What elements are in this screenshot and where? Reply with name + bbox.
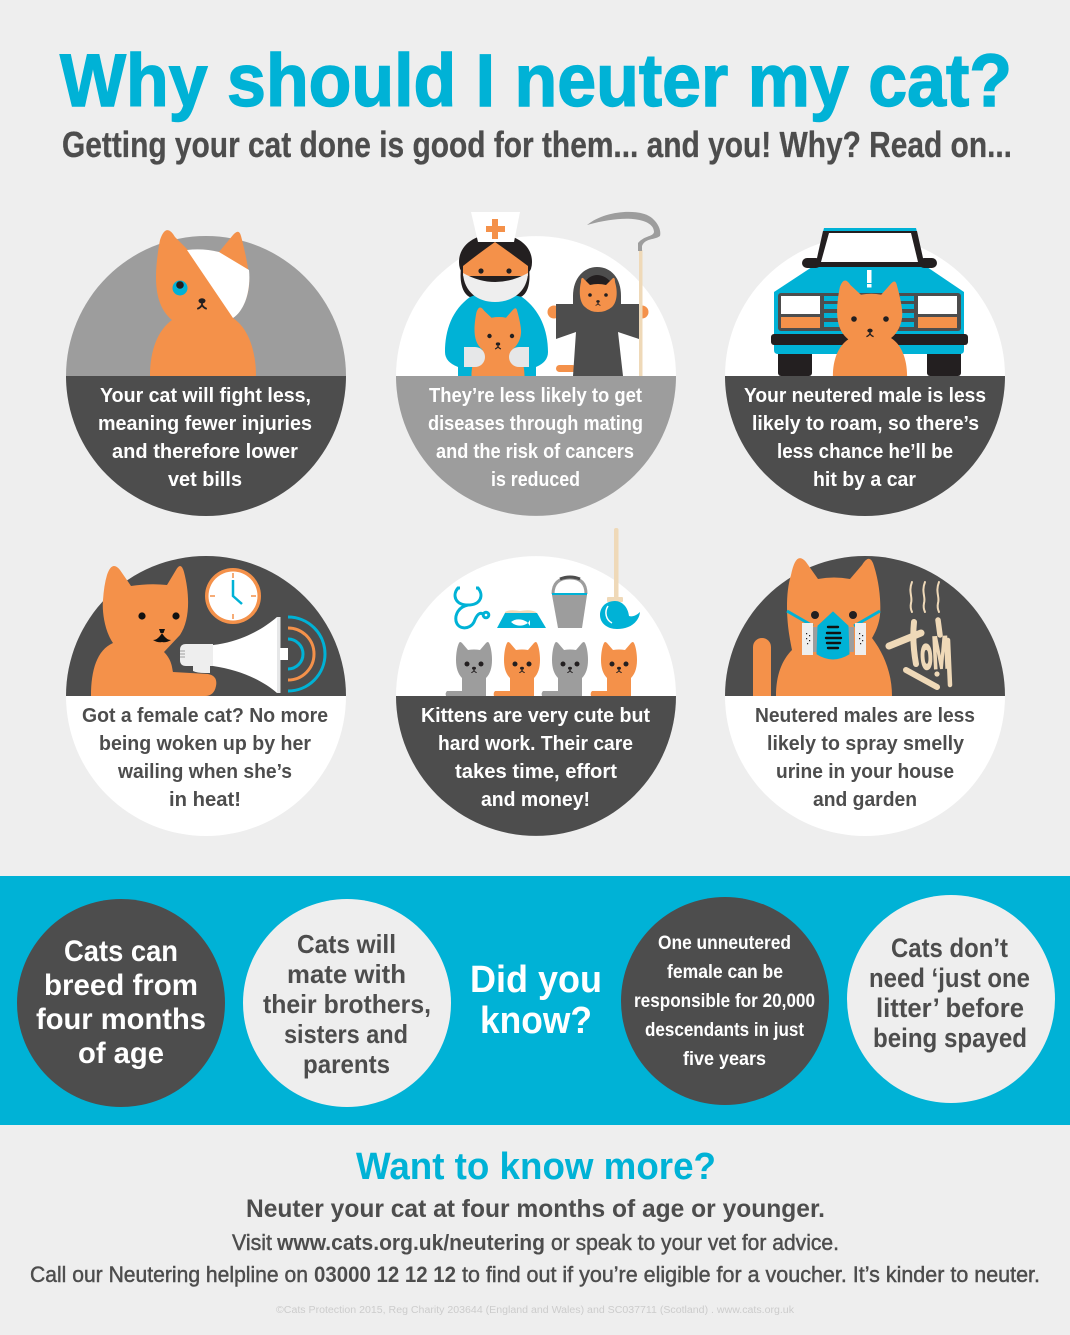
panel text xyxy=(755,705,975,811)
fact: 20,000 descendants: descendants in just xyxy=(645,1020,805,1041)
fact: mate with family: sisters and xyxy=(284,1019,408,1049)
visit line: Visit xyxy=(232,1230,272,1255)
panel: diseases xyxy=(396,212,676,516)
fact: mate with family: parents xyxy=(303,1049,390,1079)
fact: breed from four months: breed from xyxy=(44,969,198,1002)
panel: fight less xyxy=(66,230,346,516)
fact: 20,000 descendants: responsible for 20,000 xyxy=(634,991,815,1012)
fact: 20,000 descendants: One unneutered xyxy=(658,933,791,954)
title: Why should I neuter my cat? xyxy=(60,39,1012,122)
icon: four kittens xyxy=(446,642,637,696)
panel text: and money! xyxy=(481,789,590,811)
fact: just one litter: litter’ before xyxy=(876,993,1024,1023)
icon: bucket xyxy=(552,577,587,628)
fact: 20,000 descendants: five years xyxy=(683,1049,766,1070)
panel text xyxy=(744,385,986,491)
icon: food bowl xyxy=(497,610,546,628)
heading: want to know more: Want to know more? xyxy=(356,1146,716,1188)
fact: breed from four months: Cats can xyxy=(64,935,178,968)
icon: car xyxy=(771,228,968,376)
panel text: being woken up by her xyxy=(99,733,311,755)
panel: spraying xyxy=(725,556,1005,836)
panel text: and therefore lower xyxy=(112,441,298,463)
fact: just one litter: need ‘just one xyxy=(869,963,1030,993)
panel text: likely to roam, so there’s xyxy=(752,413,979,435)
panel text: wailing when she’s xyxy=(117,761,292,783)
panel text xyxy=(82,705,328,811)
heading: did you know xyxy=(470,959,602,1042)
panel text: and the risk of cancers xyxy=(436,441,634,463)
panel text: likely to spray smelly xyxy=(767,733,965,755)
panel text xyxy=(428,385,643,491)
fact: mate with family: mate with xyxy=(287,959,406,989)
fact: just one litter: being spayed xyxy=(873,1023,1027,1053)
panel text: Neutered males are less xyxy=(755,705,975,727)
heading: did you know: Did you xyxy=(470,959,602,1001)
fact: 20,000 descendants: female can be xyxy=(667,962,783,983)
panel text: They’re less likely to get xyxy=(429,385,642,407)
panel text: hard work. Their care xyxy=(438,733,633,755)
panel text: takes time, effort xyxy=(455,761,617,783)
helpline line: Call our Neutering helpline on xyxy=(30,1262,308,1287)
helpline line: to find out if you’re eligible for a voucher. It’s kinder to neuter. xyxy=(462,1262,1040,1287)
icon: injured cat with bandage xyxy=(150,230,256,376)
icon: cat in gas mask xyxy=(753,558,892,696)
footer credit: ©Cats Protection 2015, Reg Charity 203644 (England and Wales) and SC037711 (Scotland) . www.cats.org.uk xyxy=(276,1305,795,1316)
panel text: Your cat will fight less, xyxy=(100,385,311,407)
panel: kittens xyxy=(396,528,676,836)
panel text: and garden xyxy=(813,789,917,811)
icon: cat with megaphone xyxy=(91,566,288,696)
fact: breed from four months: four months xyxy=(36,1003,206,1036)
icon: nurse holding cat xyxy=(445,212,548,376)
panel: wailing xyxy=(66,556,346,836)
fact: just one litter xyxy=(847,895,1055,1103)
visit line: www.cats.org.uk/neutering xyxy=(276,1230,545,1255)
fact: breed from four months xyxy=(17,899,225,1107)
panel text: less chance he’ll be xyxy=(777,441,953,463)
panel text: Got a female cat? No more xyxy=(82,705,328,727)
panel text: urine in your house xyxy=(776,761,954,783)
icon: graffiti tag xyxy=(889,620,950,687)
helpline line: 03000 12 12 12 xyxy=(314,1262,456,1287)
helpline line xyxy=(30,1262,1040,1287)
panel text: diseases through mating xyxy=(428,413,643,435)
fact: breed from four months: of age xyxy=(78,1037,164,1070)
visit line xyxy=(232,1230,839,1255)
panel: roaming xyxy=(725,228,1005,516)
icon: stethoscope xyxy=(455,588,489,628)
icon: clock xyxy=(205,568,261,624)
panel: did you know band xyxy=(0,876,1070,1125)
icon: graffiti tag: oM xyxy=(919,628,950,679)
panel text: in heat! xyxy=(169,789,241,811)
icon: mop xyxy=(600,528,640,629)
panel text xyxy=(421,705,650,811)
panel text xyxy=(98,385,312,491)
fact: 20,000 descendants xyxy=(621,897,829,1105)
panel text: hit by a car xyxy=(813,469,916,491)
icon: cat in front of car xyxy=(833,280,907,376)
fact: mate with family: their brothers, xyxy=(263,989,431,1019)
icon: sound waves xyxy=(288,617,325,691)
panel text: Kittens are very cute but xyxy=(421,705,650,727)
panel text: vet bills xyxy=(168,469,242,491)
fact: just one litter: Cats don’t xyxy=(891,933,1008,963)
panel text: Your neutered male is less xyxy=(744,385,986,407)
fact: mate with family xyxy=(243,899,451,1107)
visit line: or speak to your vet for advice. xyxy=(551,1230,839,1255)
panel text: meaning fewer injuries xyxy=(98,413,312,435)
call to action: Neuter your cat at four months of age or younger. xyxy=(246,1195,825,1223)
heading: did you know: know? xyxy=(480,1000,592,1042)
panel text: is reduced xyxy=(491,469,580,491)
fact: mate with family: Cats will xyxy=(297,929,396,959)
icon: smell lines xyxy=(910,582,939,612)
icon: grim reaper cat with scythe xyxy=(548,212,660,376)
